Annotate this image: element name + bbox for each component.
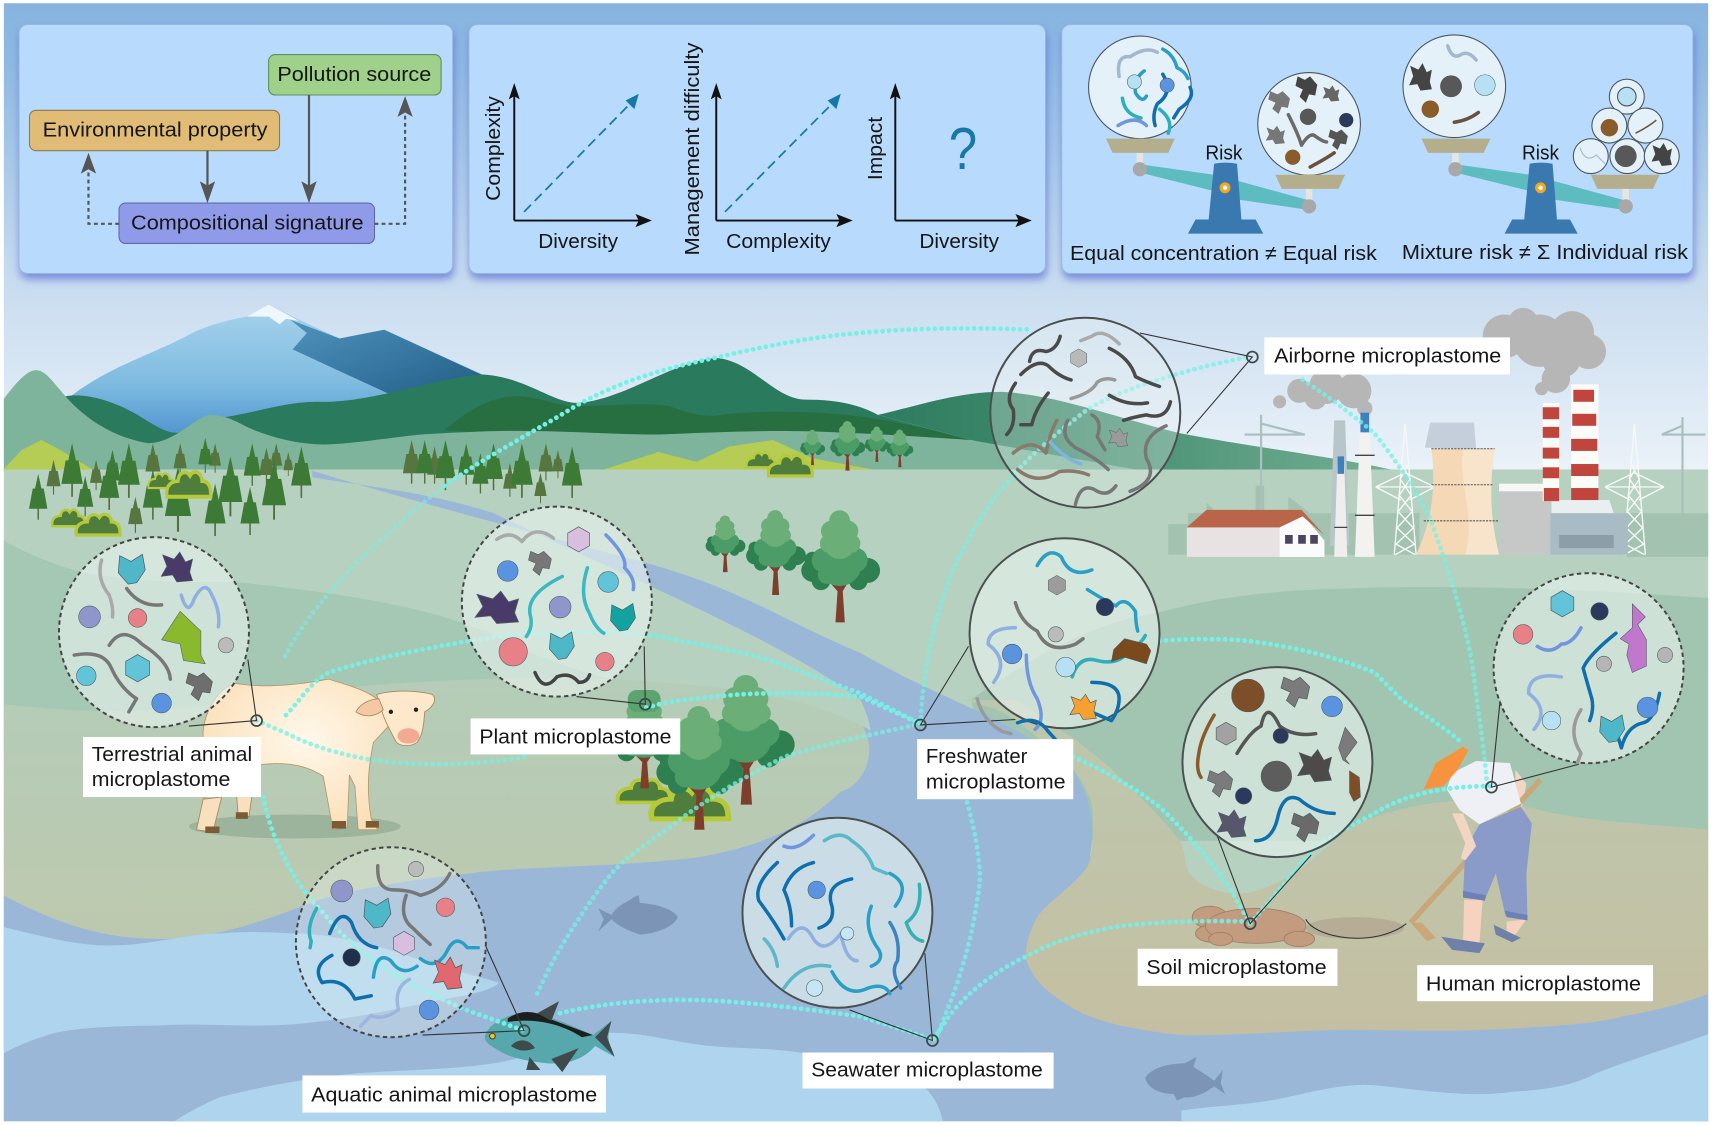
risk label: Risk bbox=[1205, 141, 1243, 164]
farmer bbox=[1411, 747, 1541, 953]
lime hills bbox=[3, 440, 873, 469]
box: environmental property bbox=[30, 110, 280, 151]
label: seawater bbox=[803, 1053, 1054, 1089]
green ground band left bbox=[4, 540, 500, 754]
circle: seawater microplastome bbox=[742, 818, 932, 1008]
circle: human microplastome bbox=[1494, 573, 1684, 763]
label: airborne bbox=[1264, 337, 1510, 374]
circle: terrestrial animal microplastome bbox=[59, 537, 249, 727]
sand shore bbox=[963, 700, 1712, 1035]
chart: management difficulty vs complexity: Complexity bbox=[726, 230, 832, 253]
circle: freshwater microplastome bbox=[970, 538, 1160, 753]
light water bands bbox=[3, 927, 1712, 1125]
label: terrestrial animal: Terrestrial animal bbox=[92, 743, 252, 766]
right pine forest bbox=[403, 440, 582, 503]
balance: mixture risk bbox=[1402, 35, 1689, 264]
far green hills bbox=[3, 370, 1136, 472]
chart: impact vs diversity: Diversity bbox=[919, 230, 1000, 253]
power plant blocks bbox=[1499, 491, 1550, 555]
dashed arrow: signature to source bbox=[375, 96, 413, 224]
small distant trees bbox=[800, 421, 913, 471]
house bbox=[1186, 528, 1324, 557]
box: pollution source: Pollution source bbox=[277, 63, 431, 86]
box: environmental property: Environmental property bbox=[43, 118, 268, 141]
leader lines and rings bbox=[189, 333, 1579, 1046]
label: seawater: Seawater microplastome bbox=[811, 1059, 1043, 1082]
cooling tower bbox=[1416, 449, 1499, 555]
pylons bbox=[1376, 424, 1664, 555]
label: human: Human microplastome bbox=[1426, 972, 1641, 995]
snow-capped mountain bbox=[68, 305, 486, 437]
ghost skyline bbox=[1168, 486, 1709, 557]
label: plant bbox=[471, 718, 680, 754]
box: compositional signature bbox=[119, 203, 375, 243]
river bbox=[312, 470, 1092, 856]
panel: drivers flow diagram bbox=[19, 25, 453, 273]
label: freshwater: Freshwater bbox=[926, 745, 1028, 768]
chart: management difficulty vs complexity: Management difficulty bbox=[681, 42, 704, 255]
bushes bbox=[52, 453, 812, 535]
darker ridge bbox=[444, 396, 971, 440]
left land bbox=[3, 678, 869, 939]
middle trees bbox=[706, 510, 880, 622]
green ground band right bbox=[972, 587, 1712, 841]
box: pollution source bbox=[269, 55, 441, 95]
sky bbox=[0, 0, 1712, 472]
panel: risk balances bbox=[1062, 25, 1693, 273]
left pine forest bbox=[29, 438, 312, 536]
thin chimneys bbox=[1334, 459, 1347, 557]
chart: complexity vs diversity: Complexity bbox=[482, 95, 505, 201]
circle: airborne microplastome bbox=[990, 318, 1180, 508]
solid arrow: source to signature bbox=[301, 95, 317, 203]
circle: plant microplastome bbox=[462, 507, 652, 697]
sphere: particles bbox=[1258, 73, 1360, 175]
scale beam and stand bbox=[1422, 139, 1660, 234]
sea bbox=[3, 726, 1712, 1125]
label: airborne: Airborne microplastome bbox=[1274, 344, 1501, 367]
circle: aquatic animal microplastome bbox=[296, 847, 486, 1037]
cow bbox=[189, 679, 435, 839]
ground bbox=[0, 469, 1712, 1125]
box: compositional signature: Compositional signature bbox=[131, 211, 364, 234]
sphere: microfibres bbox=[1089, 36, 1191, 139]
label: soil: Soil microplastome bbox=[1146, 956, 1327, 979]
chart: impact vs diversity: Impact bbox=[864, 117, 887, 180]
solid arrow: environment to signature bbox=[200, 151, 215, 203]
circle: soil microplastome bbox=[1182, 667, 1372, 857]
red and white stacks bbox=[1543, 384, 1598, 501]
aquatic fish bbox=[485, 1001, 615, 1072]
particle pile bbox=[1573, 79, 1679, 174]
chart: management difficulty vs complexity bbox=[681, 42, 853, 255]
ghost fish bbox=[598, 895, 1225, 1101]
label: soil bbox=[1138, 949, 1337, 986]
factory bbox=[1168, 308, 1709, 557]
label: aquatic animal: Aquatic animal microplastome bbox=[311, 1084, 597, 1107]
chart: impact vs diversity: ? bbox=[949, 117, 977, 182]
sphere: mixture bbox=[1403, 35, 1506, 138]
soil mound bbox=[1192, 906, 1315, 947]
foreground tree cluster bbox=[608, 675, 795, 830]
label: terrestrial animal: microplastome bbox=[92, 768, 230, 791]
dark green ridge bbox=[66, 358, 970, 444]
hill behind factory bbox=[878, 392, 1391, 469]
caption: mixture risk: Mixture risk ≠ Σ Individual risk bbox=[1402, 241, 1689, 264]
dug hole bbox=[1306, 917, 1406, 939]
balance: equal concentration bbox=[1070, 36, 1377, 265]
smoke clouds bbox=[1273, 308, 1606, 416]
chart: complexity vs diversity bbox=[482, 83, 652, 253]
risk label: Risk bbox=[1522, 141, 1560, 164]
caption: equal concentration: Equal concentration ≠ Equal risk bbox=[1070, 242, 1377, 265]
label: freshwater bbox=[917, 739, 1073, 799]
label: aquatic animal bbox=[302, 1075, 606, 1113]
label: plant: Plant microplastome bbox=[479, 726, 671, 749]
chart: complexity vs diversity: Diversity bbox=[538, 230, 619, 253]
dotted transfer paths bbox=[257, 328, 1491, 1039]
panel: relationship charts bbox=[469, 25, 1045, 273]
dashed arrow: signature to environment bbox=[81, 153, 119, 224]
label: terrestrial animal bbox=[83, 737, 261, 797]
label: human bbox=[1417, 965, 1653, 1001]
label: freshwater: microplastome bbox=[926, 770, 1066, 793]
scale beam and stand bbox=[1106, 139, 1345, 234]
chart: impact vs diversity bbox=[864, 83, 1032, 253]
